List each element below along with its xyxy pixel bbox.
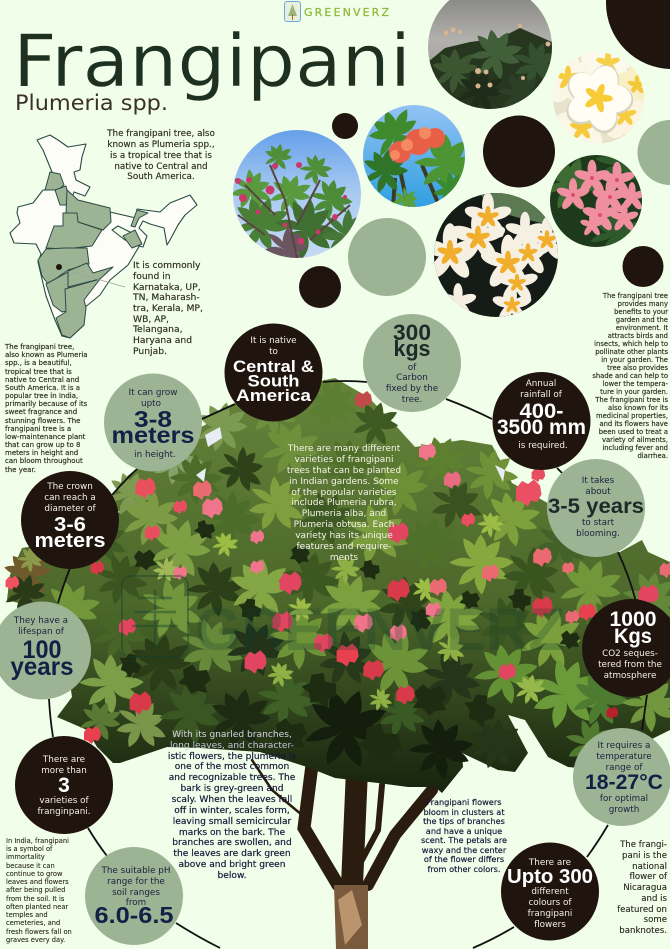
dark foliage shadows xyxy=(116,517,582,774)
stat: native range: South xyxy=(248,372,300,390)
text: right description: tree also provides xyxy=(607,364,668,372)
stat: years to bloom: It takes xyxy=(582,476,615,486)
text: national flower: pani is the xyxy=(622,851,667,861)
text: national flower: some xyxy=(644,915,667,925)
trunk xyxy=(252,760,432,949)
text: flower description: and have a unique xyxy=(426,826,502,836)
text: symbol of immortality: because it can xyxy=(6,862,55,870)
stat: temperature: 18-27°C xyxy=(585,771,663,794)
logo xyxy=(284,2,389,22)
text: right description: in your garden. The xyxy=(601,356,668,364)
stat: CO2 sequestered: 1000 xyxy=(610,608,656,631)
text: symbol of immortality: often planted near xyxy=(6,903,68,911)
stat: native range xyxy=(224,324,322,422)
text: varieties on canopy: features and require- xyxy=(296,542,392,552)
text: varieties on canopy: varieties of frangipani xyxy=(295,455,393,465)
text: right description: provides many xyxy=(618,300,668,308)
text: right description: variety of ailments, xyxy=(602,436,668,444)
stat: lifespan: years xyxy=(10,653,74,681)
photo: tree against grey sky xyxy=(428,0,552,109)
text: national flower: national xyxy=(632,862,667,872)
text: bark description: marks on the bark. The xyxy=(179,828,285,838)
text: left description: sweet fragrance and xyxy=(5,408,77,416)
text: bark description: long leaves, and character- xyxy=(170,741,294,751)
text: symbol of immortality xyxy=(6,837,72,944)
stat: height: meters xyxy=(112,422,194,448)
stat: carbon fixed: kgs xyxy=(394,336,430,361)
text: varieties on canopy: ments xyxy=(330,553,358,563)
text: bark description: the leaves are dark green xyxy=(173,849,291,859)
text: left description: The frangipani tree, xyxy=(4,343,74,351)
text: bark description: and recognizable trees. The xyxy=(169,773,296,783)
stat: soil pH: 6.0-6.5 xyxy=(94,902,174,928)
stat: temperature xyxy=(573,728,670,826)
foliage clusters xyxy=(1,370,670,791)
stat: temperature: range of xyxy=(606,763,643,773)
text: flower description: scent. The petals are xyxy=(421,835,507,845)
stat: colours xyxy=(501,842,599,940)
text: right description: also known for its xyxy=(608,404,668,412)
text: intro: native to Central and xyxy=(114,162,208,172)
stat: temperature: growth xyxy=(609,805,639,815)
stat: varieties xyxy=(15,736,113,834)
stat: crown diameter xyxy=(21,471,119,569)
text: symbol of immortality: continue to grow xyxy=(6,870,63,878)
text: left description: also known as Plumeria xyxy=(5,351,88,359)
map marker dot xyxy=(56,264,62,270)
map leader line xyxy=(72,272,125,287)
stat: crown diameter: The crown xyxy=(46,482,93,492)
text: intro xyxy=(106,129,215,182)
text: varieties on canopy: in Indian gardens. Some xyxy=(289,477,399,487)
text: symbol of immortality: In India, frangipani xyxy=(6,837,69,845)
stat: colours: There are xyxy=(528,858,571,868)
stat: CO2 sequestered: atmosphere xyxy=(604,671,656,681)
stat: lifespan: lifespan of xyxy=(18,627,65,637)
text: right description: attracts birds and xyxy=(608,332,668,340)
text: intro: The frangipani tree, also xyxy=(106,129,215,139)
watermark: GREENVERZ xyxy=(195,596,565,663)
stat: carbon fixed: Carbon xyxy=(396,373,428,383)
tree illustration xyxy=(1,370,670,949)
text: right description xyxy=(592,292,669,460)
text: national flower: flower of xyxy=(629,872,668,882)
stat: rainfall xyxy=(492,372,590,470)
text: right description: ture in your garden. xyxy=(600,388,668,396)
text: right description: and its flowers have xyxy=(599,420,668,428)
stat: carbon fixed xyxy=(363,314,461,412)
text: left description: native to Central and xyxy=(5,376,79,384)
text: symbol of immortality: leaves and flowers xyxy=(6,878,69,886)
stat: height: in height. xyxy=(134,450,176,460)
text: symbol of immortality: from the soil. It is xyxy=(6,895,65,903)
text: left description: frangipani tree is a xyxy=(5,425,71,433)
text: bark description: one of the most common xyxy=(175,762,289,772)
text: commonly found: Karnataka, UP, xyxy=(133,282,201,293)
text: flower description: waxy and the center xyxy=(422,845,507,855)
stat: colours: frangipani xyxy=(528,909,572,919)
text: right description: insects, which help to xyxy=(594,340,668,348)
text: left description: meters in height and xyxy=(5,449,78,457)
text: left description: stunning flowers. The xyxy=(5,417,80,425)
text: flower description: of the flower differs xyxy=(424,854,504,864)
text: commonly found: found in xyxy=(133,271,171,282)
text: left description: tropical tree that is xyxy=(5,368,72,376)
stat: temperature: temperature xyxy=(596,752,652,762)
stat: rainfall: is required. xyxy=(518,441,568,451)
text: right description: The frangipani tree xyxy=(602,292,668,300)
text: bark description: With its gnarled branches, xyxy=(172,730,292,740)
text: varieties on canopy: variety has its unique xyxy=(295,531,393,541)
text: commonly found: tra, Kerala, MP, xyxy=(133,303,203,314)
stat: varieties: There are xyxy=(42,755,85,765)
text: varieties on canopy: There are many different xyxy=(287,444,401,454)
text: symbol of immortality: fresh flowers fall on xyxy=(6,928,72,936)
stat: soil pH: soil ranges xyxy=(112,888,160,898)
stat: varieties: 3 xyxy=(58,774,70,797)
text: flower description: Frangipani flowers xyxy=(427,797,501,807)
text: left description: spp., is a beautiful, xyxy=(5,359,72,367)
text: commonly found: TN, Maharash- xyxy=(132,292,200,303)
stat: colours: flowers xyxy=(534,920,566,930)
stat: temperature: It requires a xyxy=(598,741,650,751)
text: varieties on canopy: Plumeria alba, and xyxy=(302,509,386,519)
stat: crown diameter: can reach a xyxy=(44,493,96,503)
text: bark description: leaving small semicircular xyxy=(173,817,292,827)
text: left description: that can grow up to 8 xyxy=(5,441,80,449)
text: national flower: banknotes. xyxy=(619,926,667,936)
stat: rainfall: 400- xyxy=(520,400,564,423)
stat: lifespan: They have a xyxy=(13,616,68,626)
text: commonly found: It is commonly xyxy=(133,260,201,271)
stat: years to bloom xyxy=(547,459,645,557)
stat: carbon fixed: fixed by the xyxy=(386,384,438,394)
text: right description: medicinal properties, xyxy=(596,412,668,420)
stat: rainfall: 3500 mm xyxy=(497,416,586,439)
watermark xyxy=(122,576,565,663)
photo: red flower cluster on blue sky xyxy=(363,105,465,207)
stat: rainfall: rainfall of xyxy=(520,390,563,400)
stat: crown diameter: 3-6 xyxy=(54,514,86,536)
text: bark description: below. xyxy=(218,871,246,881)
text: national flower xyxy=(617,840,668,936)
text: symbol of immortality: immortality xyxy=(6,853,45,861)
stat: carbon fixed: 300 xyxy=(393,320,431,345)
text: left description: the year. xyxy=(5,466,36,474)
stat: lifespan xyxy=(0,602,91,700)
text: bark description: bark is grey-green and xyxy=(180,784,284,794)
photo: pink flowers on dark leaves xyxy=(550,155,642,247)
stat: crown diameter: meters xyxy=(34,530,106,552)
text: flower description: the tips of branches xyxy=(423,816,505,826)
text: left description: primarily because of its xyxy=(5,400,88,408)
stat: years to bloom: to start xyxy=(582,518,615,528)
stat: soil pH: range for the xyxy=(107,877,165,887)
stat: years to bloom: 3-5 years xyxy=(548,495,644,518)
decorative circle: top right xyxy=(606,0,670,69)
text: national flower: and is xyxy=(641,894,668,904)
text: right description: benefits to your xyxy=(614,308,668,316)
stat: CO2 sequestered: Kgs xyxy=(614,625,652,648)
text: bark description: istic flowers, the plumeria is xyxy=(168,752,296,762)
stat: crown diameter: diameter of xyxy=(44,504,96,514)
text: flower description: from other colors. xyxy=(427,864,501,874)
text: varieties on canopy: trees that can be planted xyxy=(287,466,401,476)
title: Frangipani xyxy=(13,19,411,103)
decorative circle: sage xyxy=(348,218,426,296)
text: right description: including fever and xyxy=(602,444,668,452)
text: bark description: above and bright green xyxy=(178,860,286,870)
text: right description: pollinate other plants xyxy=(595,348,668,356)
decorative circle: sage right xyxy=(638,120,670,185)
stat: CO2 sequestered: CO2 seques- xyxy=(602,649,658,659)
text: left description: popular tree in India, xyxy=(5,392,78,400)
sky gaps in foliage xyxy=(108,387,505,518)
text: flower description: bloom in clusters at xyxy=(423,807,505,817)
subtitle: Plumeria spp. xyxy=(15,91,168,115)
text: left description: South America. It is a xyxy=(5,384,80,392)
text: varieties on canopy: include Plumeria rubra, xyxy=(291,498,397,508)
stat: colours: Upto 300 xyxy=(507,866,593,888)
decorative circle: dark right xyxy=(622,246,664,287)
text: left description: can bloom throughout xyxy=(5,457,83,465)
photo: white and yellow flowers on dark xyxy=(434,193,558,317)
text: commonly found xyxy=(132,260,203,357)
text: bark description: off in winter, scales form, xyxy=(174,806,290,816)
text: right description: garden and the xyxy=(616,316,668,324)
text: symbol of immortality: is a symbol of xyxy=(6,845,53,853)
text: symbol of immortality: graves every day. xyxy=(6,936,65,944)
text: symbol of immortality: cemeteries, and xyxy=(6,919,60,927)
text: commonly found: WB, AP, xyxy=(133,314,169,325)
logo: GREENVERZ xyxy=(304,6,389,19)
text: left description xyxy=(4,343,88,474)
stat: native range: America xyxy=(236,386,312,405)
photo: pink flowering tree on blue sky xyxy=(233,130,361,258)
stat: height: It can grow xyxy=(128,388,178,398)
canopy silhouette xyxy=(7,378,670,793)
stat: height: 3-8 xyxy=(134,406,172,432)
decorative circle: dark centre xyxy=(483,116,555,188)
stat: native range: to xyxy=(269,347,278,357)
text: right description: diarrhea. xyxy=(637,452,668,460)
text: intro: known as Plumeria spp., xyxy=(107,140,215,150)
stat: colours: colours of xyxy=(528,898,572,908)
text: right description: shade and can help to xyxy=(592,372,668,380)
connecting ring lines xyxy=(49,381,647,948)
text: commonly found: Telangana, xyxy=(132,324,183,335)
stat: native range: It is native xyxy=(250,336,297,346)
stat: native range: Central & xyxy=(233,357,314,376)
text: flower description xyxy=(421,797,507,874)
text: national flower: The frangi- xyxy=(619,840,667,850)
pink flowers xyxy=(6,391,670,744)
text: varieties on canopy xyxy=(287,444,401,563)
photo: white and yellow flowers xyxy=(553,52,644,144)
text: symbol of immortality: after being pulled xyxy=(6,886,65,894)
stat: rainfall: Annual xyxy=(526,379,556,389)
text: commonly found: Haryana and xyxy=(133,335,192,346)
text: commonly found: Punjab. xyxy=(133,346,167,357)
stat: years to bloom: about xyxy=(585,487,611,497)
stat: soil pH: The suitable pH xyxy=(100,866,171,876)
stat: lifespan: 100 xyxy=(22,636,62,664)
india map xyxy=(10,135,197,338)
stat: CO2 sequestered xyxy=(582,599,670,697)
stat: CO2 sequestered: tered from the xyxy=(598,660,662,670)
text: right description: been used to treat a xyxy=(599,428,668,436)
stat: soil pH: from xyxy=(126,898,146,908)
text: national flower: Nicaragua xyxy=(623,883,667,893)
stat: temperature: for optimal xyxy=(600,794,648,804)
text: right description: environment. It xyxy=(616,324,668,332)
text: intro: is a tropical tree that is xyxy=(110,151,212,161)
text: symbol of immortality: temples and xyxy=(6,911,48,919)
text: bark description: scaly. When the leaves fall xyxy=(172,795,292,805)
text: national flower: featured on xyxy=(617,905,667,915)
stat: carbon fixed: tree. xyxy=(402,395,422,405)
stat: height: upto xyxy=(141,399,161,409)
stat: height xyxy=(104,374,202,472)
stat: years to bloom: blooming. xyxy=(576,529,620,539)
stat: varieties: varieties of xyxy=(39,796,90,806)
stat: carbon fixed: of xyxy=(408,363,417,373)
text: left description: low-maintenance plant xyxy=(5,433,86,441)
text: varieties on canopy: Plumeria obtusa. Each xyxy=(294,520,394,530)
stat: colours: different xyxy=(531,887,569,897)
stat: varieties: more than xyxy=(41,766,87,776)
text: bark description: branches are swollen, and xyxy=(172,838,292,848)
text: varieties on canopy: of the popular varieties xyxy=(291,488,397,498)
decorative circle: dark left xyxy=(299,266,341,308)
text: right description: The frangipani tree is xyxy=(594,396,668,404)
decorative circle: small dark xyxy=(332,113,358,139)
text: bark description xyxy=(168,730,296,881)
text: intro: South America. xyxy=(127,172,195,182)
stat: varieties: franginpani. xyxy=(37,807,91,817)
text: right description: lower the tempera- xyxy=(603,380,669,388)
stat: soil pH xyxy=(85,847,183,945)
